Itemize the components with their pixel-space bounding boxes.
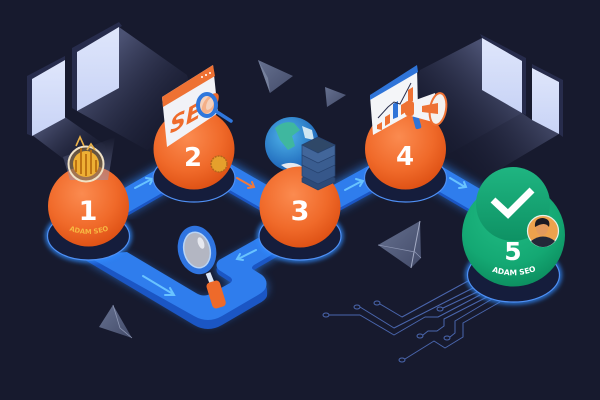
blue glowing pathway [85, 170, 490, 329]
platform rings [48, 154, 560, 302]
step 4 number: 4 [396, 142, 414, 172]
step 2 logo [211, 156, 227, 172]
step 1 label: ADAM SEO [69, 226, 108, 234]
step 1 orange sphere [48, 166, 129, 246]
avatar portrait [528, 216, 558, 247]
circuit traces [323, 281, 500, 362]
SEO lettering: SEO [170, 86, 220, 140]
step 3 number: 3 [291, 196, 309, 227]
step 2 number: 2 [184, 143, 202, 173]
icon: server stack [302, 137, 335, 190]
icon: check mark [493, 190, 532, 214]
icon: SEO browser card [162, 65, 231, 147]
icon: chart card [370, 65, 418, 135]
step 2 orange sphere [154, 108, 234, 190]
glass pyramids [99, 60, 421, 338]
step 5 number: 5 [504, 237, 522, 266]
path arrows [135, 178, 466, 295]
magnifier [198, 94, 231, 121]
icon: coin with upward beam [63, 137, 115, 182]
step 5 green sphere [462, 167, 565, 286]
icon: megaphone [405, 92, 449, 130]
right light panels [400, 34, 563, 197]
step 1 number: 1 [79, 196, 97, 227]
left light panels [27, 22, 200, 190]
step 4 orange sphere [365, 108, 446, 190]
icon: large magnifying glass [173, 222, 227, 309]
step 5 label: ADAM SEO [492, 266, 536, 276]
icon: globe [265, 117, 319, 171]
step 3 orange sphere [260, 166, 340, 248]
